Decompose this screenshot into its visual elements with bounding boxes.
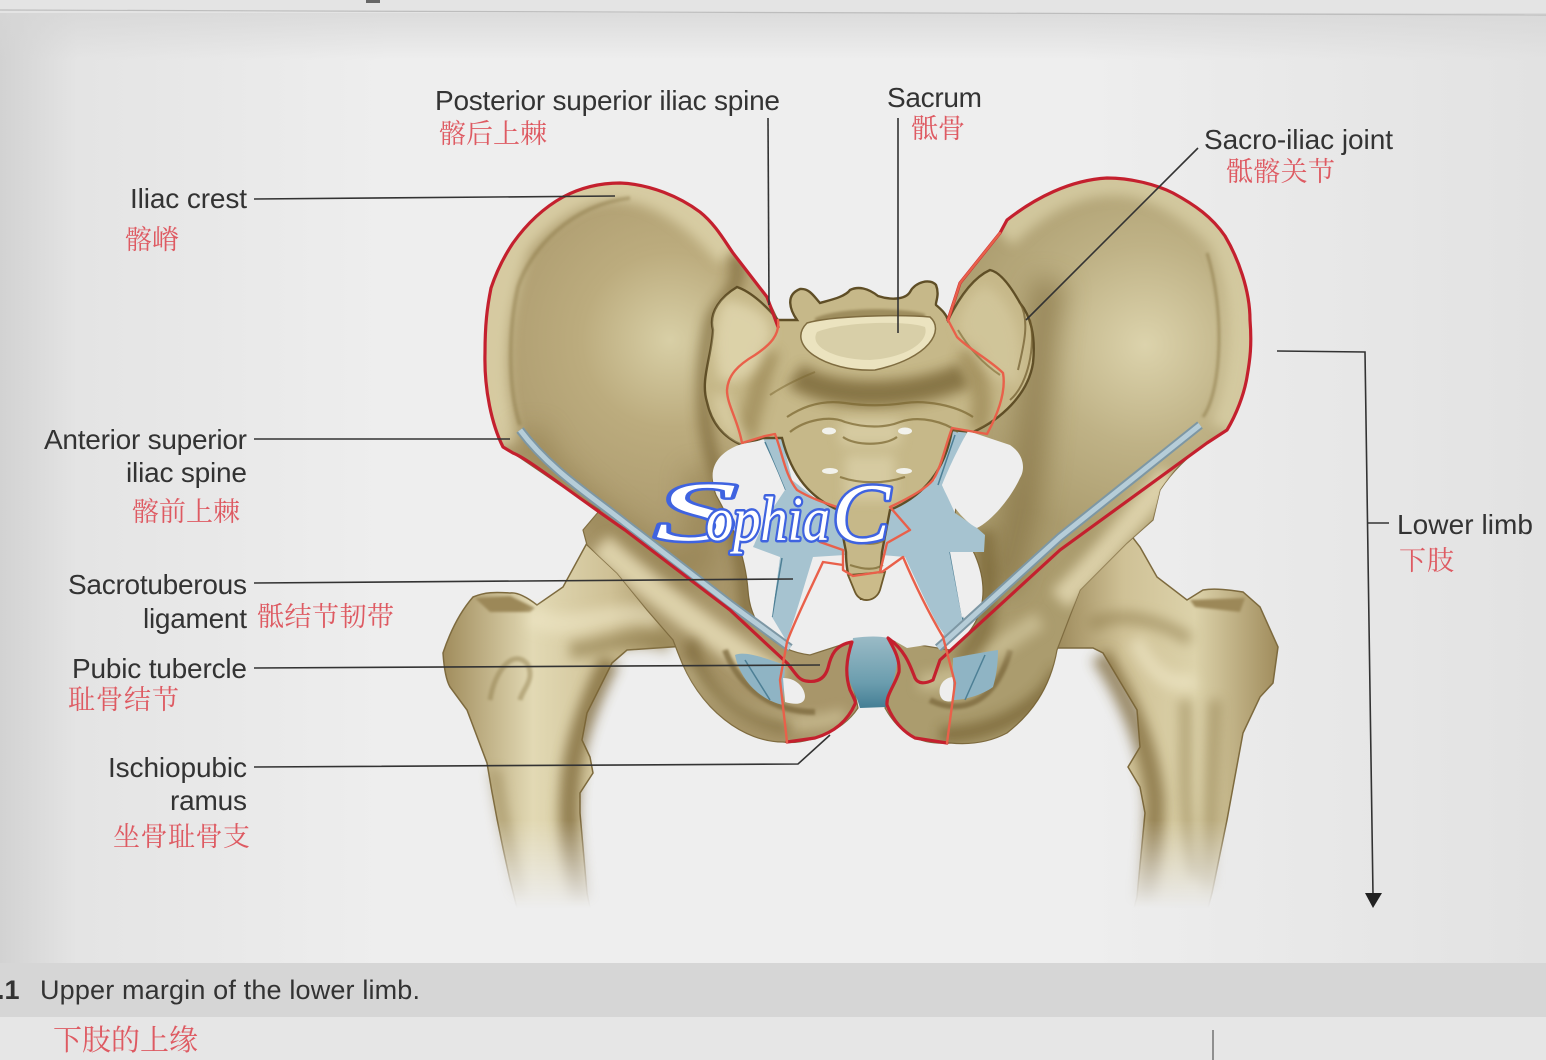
label: sacrotuberous ligament: ligament [143, 603, 247, 634]
bracket arrow: lower limb extent [1277, 351, 1389, 908]
leader: pubic tubercle [254, 665, 820, 668]
label: pubic tubercle: 耻骨结节 [68, 685, 179, 715]
leader: anterior superior iliac spine [254, 438, 510, 440]
label: iliac crest: 髂嵴 [125, 225, 179, 255]
right hip bone [885, 178, 1251, 744]
label: anterior superior iliac spine: iliac spine [126, 457, 247, 488]
label: lower limb: Lower limb [1397, 509, 1533, 540]
pubic symphysis [847, 636, 897, 708]
watermark: SophiaC: ophia [706, 486, 830, 554]
watermark: SophiaC: C [832, 467, 891, 560]
pelvic openings [713, 431, 1023, 704]
label: posterior superior iliac spine [435, 85, 780, 149]
sacrum [705, 270, 1034, 600]
label: sacrotuberous ligament: Sacrotuberous [68, 569, 247, 600]
label: anterior superior iliac spine: Anterior superior [44, 424, 247, 455]
orange-red line to lower right [882, 557, 955, 743]
right femur [1040, 530, 1278, 908]
label: sacrum [887, 82, 982, 144]
label: sacrum: 骶骨 [911, 114, 965, 144]
leader: sacro-iliac joint [1026, 148, 1198, 320]
dark red margin left [485, 183, 855, 742]
leader: sacrotuberous ligament [254, 579, 793, 583]
watermark: SophiaC: S [655, 466, 737, 559]
label: lower limb [1397, 509, 1533, 576]
ligaments and membranes [735, 430, 998, 705]
label: ischiopubic ramus: 坐骨耻骨支 [113, 822, 250, 852]
label: ischiopubic ramus: Ischiopubic [108, 752, 247, 783]
label: anterior superior iliac spine [44, 424, 247, 527]
label: pubic tubercle [68, 653, 247, 715]
label: sacro-iliac joint: Sacro-iliac joint [1204, 124, 1393, 155]
dark red margin right [887, 178, 1251, 743]
pelvis and femurs illustration [443, 178, 1278, 908]
leader: posterior superior iliac spine [768, 118, 769, 305]
lumbar disc surface [801, 309, 935, 370]
label: posterior superior iliac spine: Posterior superior iliac spine [435, 85, 780, 116]
orange-red line to lower left [780, 562, 843, 742]
sacrum details [715, 285, 1032, 569]
left hip bone [485, 183, 858, 743]
label: iliac crest [125, 183, 247, 255]
label: sacro-iliac joint [1204, 124, 1393, 187]
label: sacrotuberous ligament: 骶结节韧带 [257, 602, 394, 632]
left femur [443, 543, 700, 908]
caption translation: 下肢的上缘 [53, 1024, 198, 1057]
leader: sacrum [897, 118, 899, 333]
right hip shading [920, 178, 1246, 735]
caption band [0, 963, 1546, 1060]
coccyx [848, 572, 885, 600]
orange-red margin line [727, 233, 1004, 576]
caption text: Upper margin of the lower limb. [40, 975, 420, 1005]
watermark: SophiaC [655, 466, 891, 560]
label: sacrum: Sacrum [887, 82, 982, 113]
inguinal ligament bands [520, 425, 1200, 648]
label: anterior superior iliac spine: 髂前上棘 [132, 497, 240, 527]
label: pubic tubercle: Pubic tubercle [72, 653, 247, 684]
label: lower limb: 下肢 [1399, 546, 1454, 576]
label: sacrotuberous ligament [68, 569, 394, 634]
leader: iliac crest [254, 196, 615, 199]
left hip shading [490, 183, 845, 728]
label: sacro-iliac joint: 骶髂关节 [1226, 157, 1335, 187]
label: iliac crest: Iliac crest [130, 183, 247, 214]
label: posterior superior iliac spine: 髂后上棘 [439, 119, 547, 149]
label: ischiopubic ramus: ramus [170, 785, 247, 816]
leader: ischiopubic ramus [254, 735, 830, 767]
label: ischiopubic ramus [108, 752, 250, 852]
